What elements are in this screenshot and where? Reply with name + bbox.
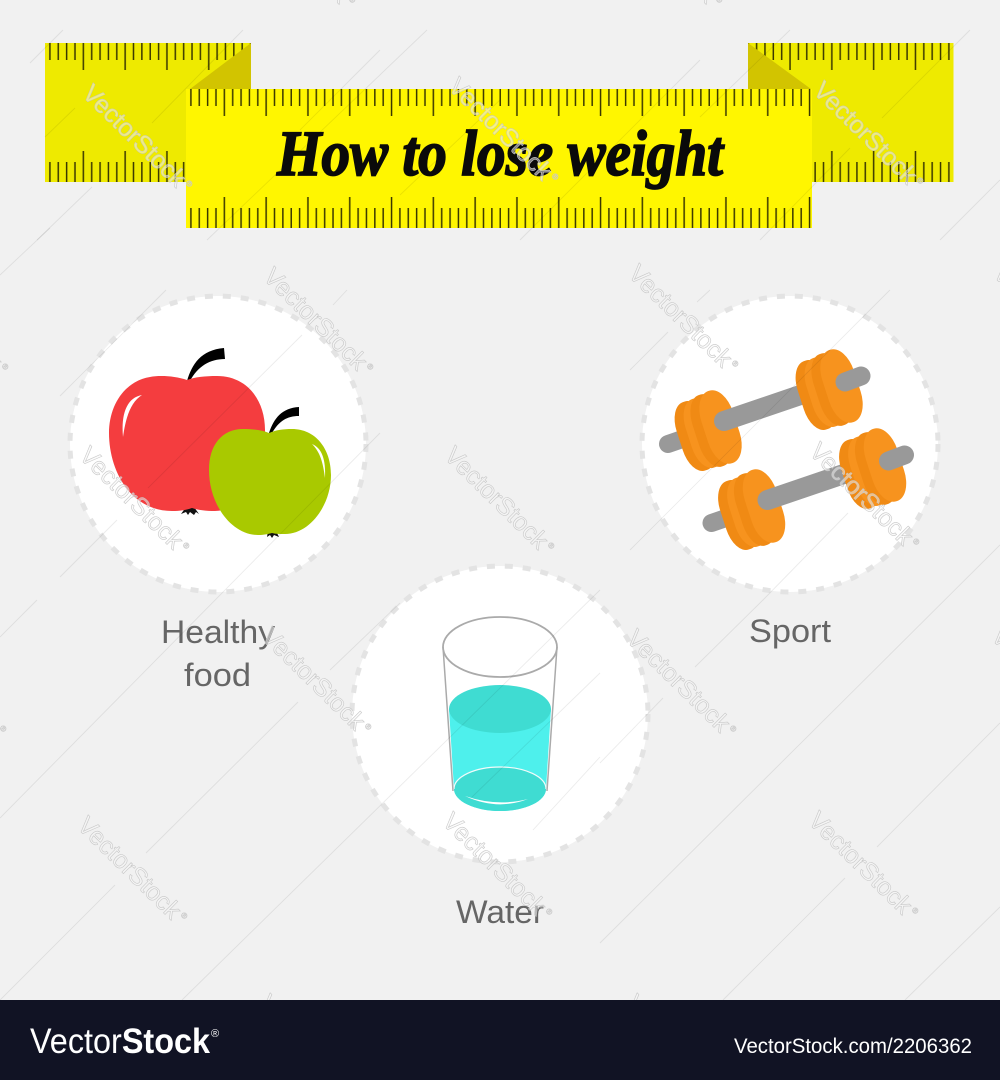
- watermarks: VectorStock: [803, 806, 918, 920]
- watermarks: ®: [0, 361, 10, 372]
- watermarks: ®: [544, 906, 554, 917]
- footer bar: [0, 1000, 1000, 1080]
- footer image id: VectorStock.com/2206362: [734, 1035, 972, 1058]
- icon: lower dumbbell: [712, 424, 912, 554]
- watermarks: ®: [179, 910, 189, 921]
- label: healthy food: [161, 614, 275, 693]
- panel: sport: [642, 296, 938, 649]
- ribbon: left back tape: [45, 43, 251, 182]
- watermarks: VectorStock: [72, 811, 187, 925]
- ribbon: front tape: [186, 89, 812, 228]
- watermarks: ®: [911, 536, 921, 547]
- watermarks: VectorStock: [437, 807, 552, 921]
- watermarks: VectorStock: [808, 76, 923, 190]
- watermarks: ®: [550, 171, 560, 182]
- icon: glass of water: [443, 617, 557, 811]
- watermarks: ®: [728, 723, 738, 734]
- label: sport: Sport: [749, 613, 831, 649]
- watermarks: ®: [915, 175, 925, 186]
- watermarks: VectorStock: [443, 72, 558, 186]
- ribbon: right back tape: [748, 43, 954, 182]
- watermarks: VectorStock: [804, 437, 919, 551]
- label: healthy food: food: [184, 657, 251, 693]
- watermarks: VectorStock: [621, 624, 736, 738]
- watermarks: VectorStock: [256, 622, 371, 736]
- label: water: Water: [456, 894, 544, 930]
- watermarks: VectorStock: [77, 79, 192, 193]
- watermarks: VectorStock: [439, 441, 554, 555]
- watermarks: ®: [730, 358, 740, 369]
- watermarks: ®: [546, 540, 556, 551]
- watermarks: ®: [184, 178, 194, 189]
- circle: water: [352, 566, 648, 862]
- circle: healthy food: [70, 296, 366, 592]
- label: healthy food: Healthy: [161, 614, 275, 650]
- watermarks: ®: [365, 361, 375, 372]
- title: How to lose weight: [276, 118, 725, 190]
- panel: water: [352, 566, 648, 930]
- panel: healthy food: [70, 296, 366, 693]
- watermarks: ®: [363, 721, 373, 732]
- footer registered mark: ®: [211, 1028, 219, 1040]
- watermarks: VectorStock: [623, 259, 738, 373]
- watermarks: ®: [181, 540, 191, 551]
- footer logo: VectorStock: [30, 1022, 210, 1061]
- watermarks: VectorStock: [74, 441, 189, 555]
- watermarks: VectorStock: [258, 262, 373, 376]
- icon: red apple: [109, 348, 265, 515]
- icon: green apple: [209, 407, 331, 538]
- icon: upper dumbbell: [668, 345, 869, 475]
- watermarks: ®: [910, 905, 920, 916]
- circle: sport: [642, 296, 938, 592]
